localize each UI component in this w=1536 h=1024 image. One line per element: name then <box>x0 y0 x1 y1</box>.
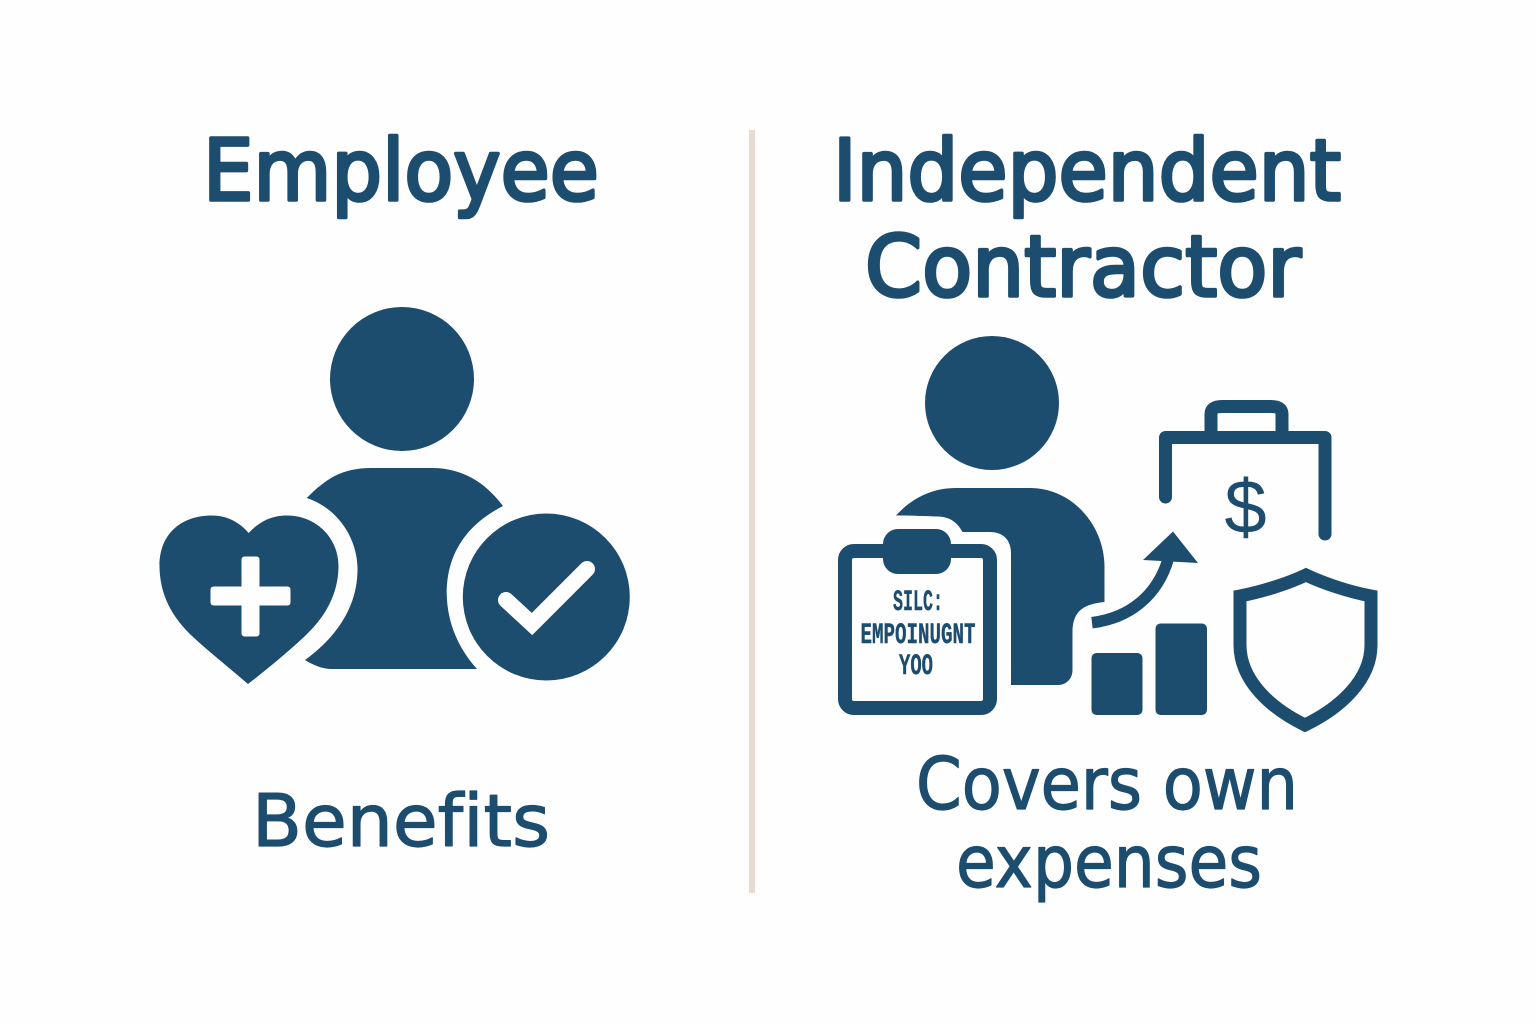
title: Independent Contractor: Independent <box>833 122 1341 221</box>
icon: growth arrow <box>1092 532 1198 623</box>
label: Covers own expenses: Covers own <box>916 742 1298 826</box>
label: Covers own expenses <box>916 742 1298 904</box>
clipboard text: EMPOINUGNT <box>860 619 976 653</box>
icon: briefcase with dollar <box>1166 406 1325 550</box>
icon: shield <box>1240 575 1371 725</box>
icon: clipboard <box>845 529 990 708</box>
icon: bars <box>1092 624 1207 715</box>
title: Independent Contractor: Contractor <box>865 218 1301 317</box>
clipboard text <box>860 586 976 684</box>
clipboard text: SILC: <box>893 586 943 620</box>
icon: contractor person <box>896 336 1104 685</box>
icon: heart with plus <box>159 516 339 684</box>
icon: check circle <box>463 514 630 680</box>
title: Independent Contractor <box>833 122 1341 317</box>
icon: briefcase with dollar: $ <box>1224 465 1267 550</box>
label: Covers own expenses: expenses <box>956 820 1262 904</box>
clipboard text: YOO <box>899 650 933 684</box>
title: Employee: Employee <box>203 122 599 221</box>
label: Benefits: Benefits <box>252 779 550 863</box>
icon: employee person <box>305 307 503 669</box>
